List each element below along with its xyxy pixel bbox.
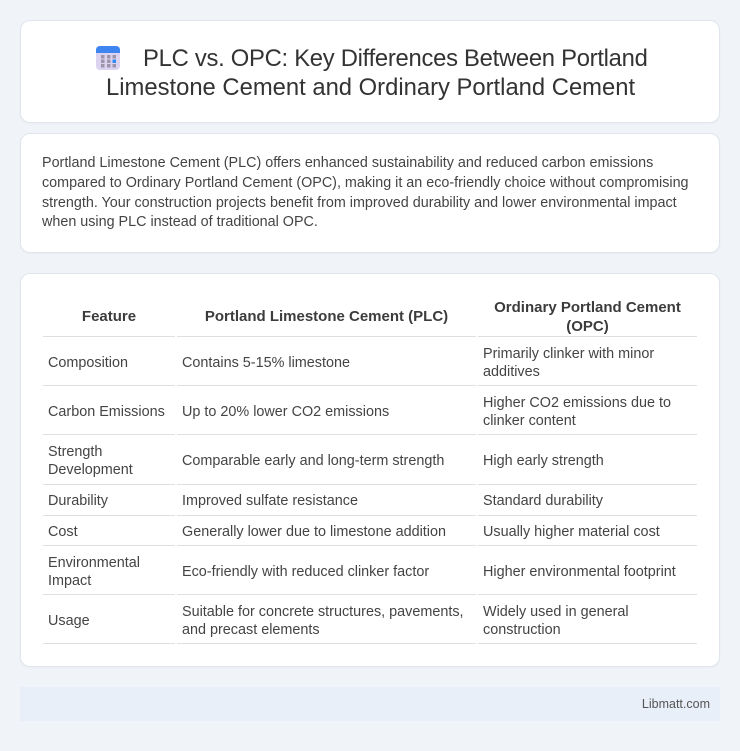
comparison table: Suitable for concrete structures, pavements, [182,604,464,620]
title: Limestone Cement and Ordinary Portland Cement [106,74,635,101]
table header: feature: Feature [82,308,136,325]
comparison table [43,299,697,644]
comparison table: Standard durability [483,493,603,509]
footer bar [20,687,720,721]
comparison table: Higher environmental footprint [483,564,676,580]
comparison table: Contains 5-15% limestone [182,355,350,371]
table header: OPC: (OPC) [566,318,609,335]
comparison table: High early strength [483,453,604,469]
intro paragraph: strength. Your construction projects benefit from improved durability and lower environmental impact [42,195,677,211]
intro paragraph: when using PLC instead of traditional OPC. [42,214,318,230]
comparison table: and precast elements [182,622,320,638]
title [106,45,648,101]
comparison table: Comparable early and long-term strength [182,453,444,469]
footer text: Libmatt.com: Libmatt.com [642,697,710,711]
comparison table: Higher CO2 emissions due to [483,395,671,411]
title: PLC vs. OPC: Key Differences Between Portland [143,45,648,72]
comparison table: Generally lower due to limestone addition [182,524,446,540]
row: environmental impact [48,555,140,589]
row: composition: Composition [48,355,128,371]
table header: OPC: Ordinary Portland Cement [494,299,681,316]
row: strength development [48,444,133,478]
row: environmental impact: Environmental [48,555,140,571]
row: strength development: Development [48,462,133,478]
header card [20,20,720,123]
comparison table: construction [483,622,561,638]
comparison table: Usually higher material cost [483,524,660,540]
row: durability: Durability [48,493,108,509]
intro paragraph: compared to Ordinary Portland Cement (OPC), making it an eco-friendly choice without compromising [42,175,689,191]
intro paragraph: Portland Limestone Cement (PLC) offers enhanced sustainability and reduced carbon emissions [42,155,653,171]
icon: calendar [96,46,120,70]
table card [20,273,720,667]
comparison table: Primarily clinker with minor [483,346,654,362]
comparison table: Eco-friendly with reduced clinker factor [182,564,429,580]
comparison table: clinker content [483,413,576,429]
table header: PLC: Portland Limestone Cement (PLC) [205,308,448,325]
comparison table: Widely used in general [483,604,629,620]
intro paragraph [42,155,689,230]
row: usage: Usage [48,613,90,629]
row: cost: Cost [48,524,78,540]
intro card [20,133,720,253]
row: strength development: Strength [48,444,102,460]
row: carbon emissions: Carbon Emissions [48,404,165,420]
row: environmental impact: Impact [48,573,91,589]
comparison table: additives [483,364,540,380]
comparison table: Improved sulfate resistance [182,493,358,509]
comparison table: Up to 20% lower CO2 emissions [182,404,389,420]
table header: OPC [494,299,681,335]
